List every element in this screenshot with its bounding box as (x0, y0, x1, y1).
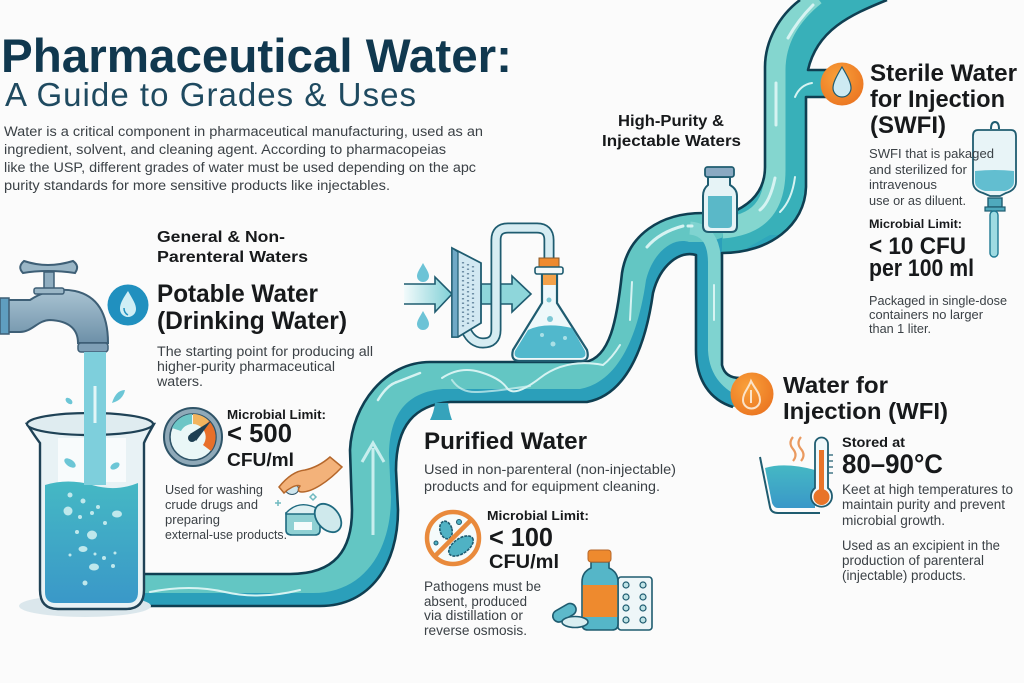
potable water description (156, 344, 373, 389)
section heading: general waters (157, 229, 308, 266)
WFI description (842, 482, 1013, 528)
icon: glass tube (466, 228, 549, 343)
WFI description: Keet at high temperatures to (842, 482, 1013, 497)
SWFI description: use or as diluent. (869, 193, 966, 208)
title: Pharmaceutical Water: (1, 29, 512, 82)
potable water uses: Used for washing (165, 482, 263, 497)
potable water heading: (Drinking Water) (157, 307, 347, 335)
WFI heading (783, 372, 948, 424)
icon: flask (512, 274, 588, 361)
purified water description: products and for equipment cleaning. (424, 478, 660, 494)
pipe network (143, 0, 888, 608)
purified water heading: Purified Water (424, 428, 587, 455)
section heading: high-purity waters: High-Purity & (618, 113, 724, 130)
microbial limit: purified: CFU/ml (489, 552, 559, 573)
potable water uses: external-use products. (165, 527, 287, 542)
potable water description: higher-purity pharmaceutical (157, 359, 335, 374)
SWFI description: intravenous (869, 177, 937, 192)
microbial limit: potable: CFU/ml (227, 449, 294, 470)
icon: heated beaker and thermometer (760, 437, 833, 513)
purified water notes (424, 579, 541, 638)
potable water description: The starting point for producing all (157, 344, 373, 359)
stored temperature (842, 434, 943, 479)
microbial limit: SWFI: Microbial Limit: (869, 217, 962, 231)
section heading: general waters: General & Non- (157, 229, 285, 246)
section heading: high-purity waters (602, 113, 741, 150)
SWFI heading: for Injection (870, 86, 1005, 113)
microbial limit: purified: Microbial Limit: (487, 508, 589, 523)
microbial limit: SWFI: < 10 CFU (869, 233, 966, 260)
SWFI heading (870, 60, 1017, 139)
potable water heading: Potable Water (157, 280, 318, 308)
intro text (4, 124, 483, 194)
purified water notes: Pathogens must be (424, 579, 541, 594)
WFI heading: Injection (WFI) (783, 398, 948, 424)
intro text: purity standards for more sensitive products like injectables. (4, 178, 390, 194)
potable water heading (157, 280, 347, 335)
purified water notes: via distillation or (424, 608, 524, 623)
intro text: Water is a critical component in pharmaceutical manufacturing, used as an (4, 124, 483, 140)
icon: gauge (164, 408, 222, 466)
icon: vial (703, 167, 737, 232)
upper branch light band (722, 0, 815, 228)
icon: water drop badge (108, 284, 148, 326)
icon: tap (0, 261, 108, 352)
arrow in pipe (362, 443, 384, 535)
microbial limit: purified (487, 508, 589, 573)
title: A Guide to Grades & Uses (5, 76, 416, 113)
icon: filter arrows (404, 263, 531, 330)
intro text: like the USP, different grades of water must be used depending on the apc (4, 160, 476, 176)
SWFI description (869, 146, 994, 208)
microbial limit: potable (227, 407, 326, 470)
icon: filter panel (452, 248, 481, 337)
potable water description: waters. (156, 374, 203, 389)
microbial limit: SWFI (869, 217, 974, 282)
potable water uses (165, 482, 287, 542)
icon: IV bag (973, 122, 1016, 257)
WFI uses: Used as an excipient in the (842, 538, 1000, 553)
potable water uses: crude drugs and (165, 497, 258, 512)
stored temperature: 80–90°C (842, 449, 943, 479)
WFI uses: (injectable) products. (842, 568, 966, 583)
icon: medicine bottle and pills (551, 550, 652, 630)
potable water uses: preparing (165, 512, 220, 527)
WFI heading: Water for (783, 372, 888, 398)
icon: no bacteria (427, 512, 479, 564)
icon: WFI badge (730, 372, 774, 416)
SWFI notes: Packaged in single-dose (869, 293, 1007, 308)
lower branch light band (690, 222, 736, 392)
SWFI notes: containers no larger (869, 307, 984, 322)
microbial limit: potable: Microbial Limit: (227, 407, 326, 422)
purified water notes: absent, produced (424, 594, 527, 609)
WFI description: microbial growth. (842, 513, 945, 528)
microbial limit: potable: < 500 (227, 418, 292, 448)
purified water description: Used in non-parenteral (non-injectable) (424, 461, 676, 477)
stored temperature: Stored at (842, 434, 905, 450)
icon: sterile drop badge (820, 62, 864, 106)
section heading: high-purity waters: Injectable Waters (602, 133, 741, 150)
SWFI description: and sterilized for (869, 162, 968, 177)
SWFI heading: (SWFI) (870, 112, 946, 139)
SWFI description: SWFI that is pakaged (869, 146, 994, 161)
icon: beaker with water stream (19, 352, 154, 617)
purified water description (424, 461, 676, 494)
pipe highlights (150, 5, 813, 596)
title (1, 29, 512, 113)
SWFI heading: Sterile Water (870, 60, 1017, 87)
microbial limit: SWFI: per 100 ml (869, 255, 974, 282)
pipe support stub (430, 403, 452, 420)
intro text: ingredient, solvent, and cleaning agent. According to pharmacopeias (4, 142, 446, 158)
upper branch medium tone (722, 0, 883, 252)
purified water notes: reverse osmosis. (424, 623, 527, 638)
icon: filter and flask (404, 228, 588, 361)
SWFI notes: than 1 liter. (869, 321, 931, 336)
WFI description: maintain purity and prevent (842, 497, 1005, 512)
icon: hand and ointment jar (275, 457, 347, 537)
WFI uses: production of parenteral (842, 553, 984, 568)
SWFI notes (869, 293, 1007, 336)
microbial limit: purified: < 100 (489, 522, 553, 552)
WFI uses (842, 538, 1000, 583)
section heading: general waters: Parenteral Waters (157, 249, 308, 266)
